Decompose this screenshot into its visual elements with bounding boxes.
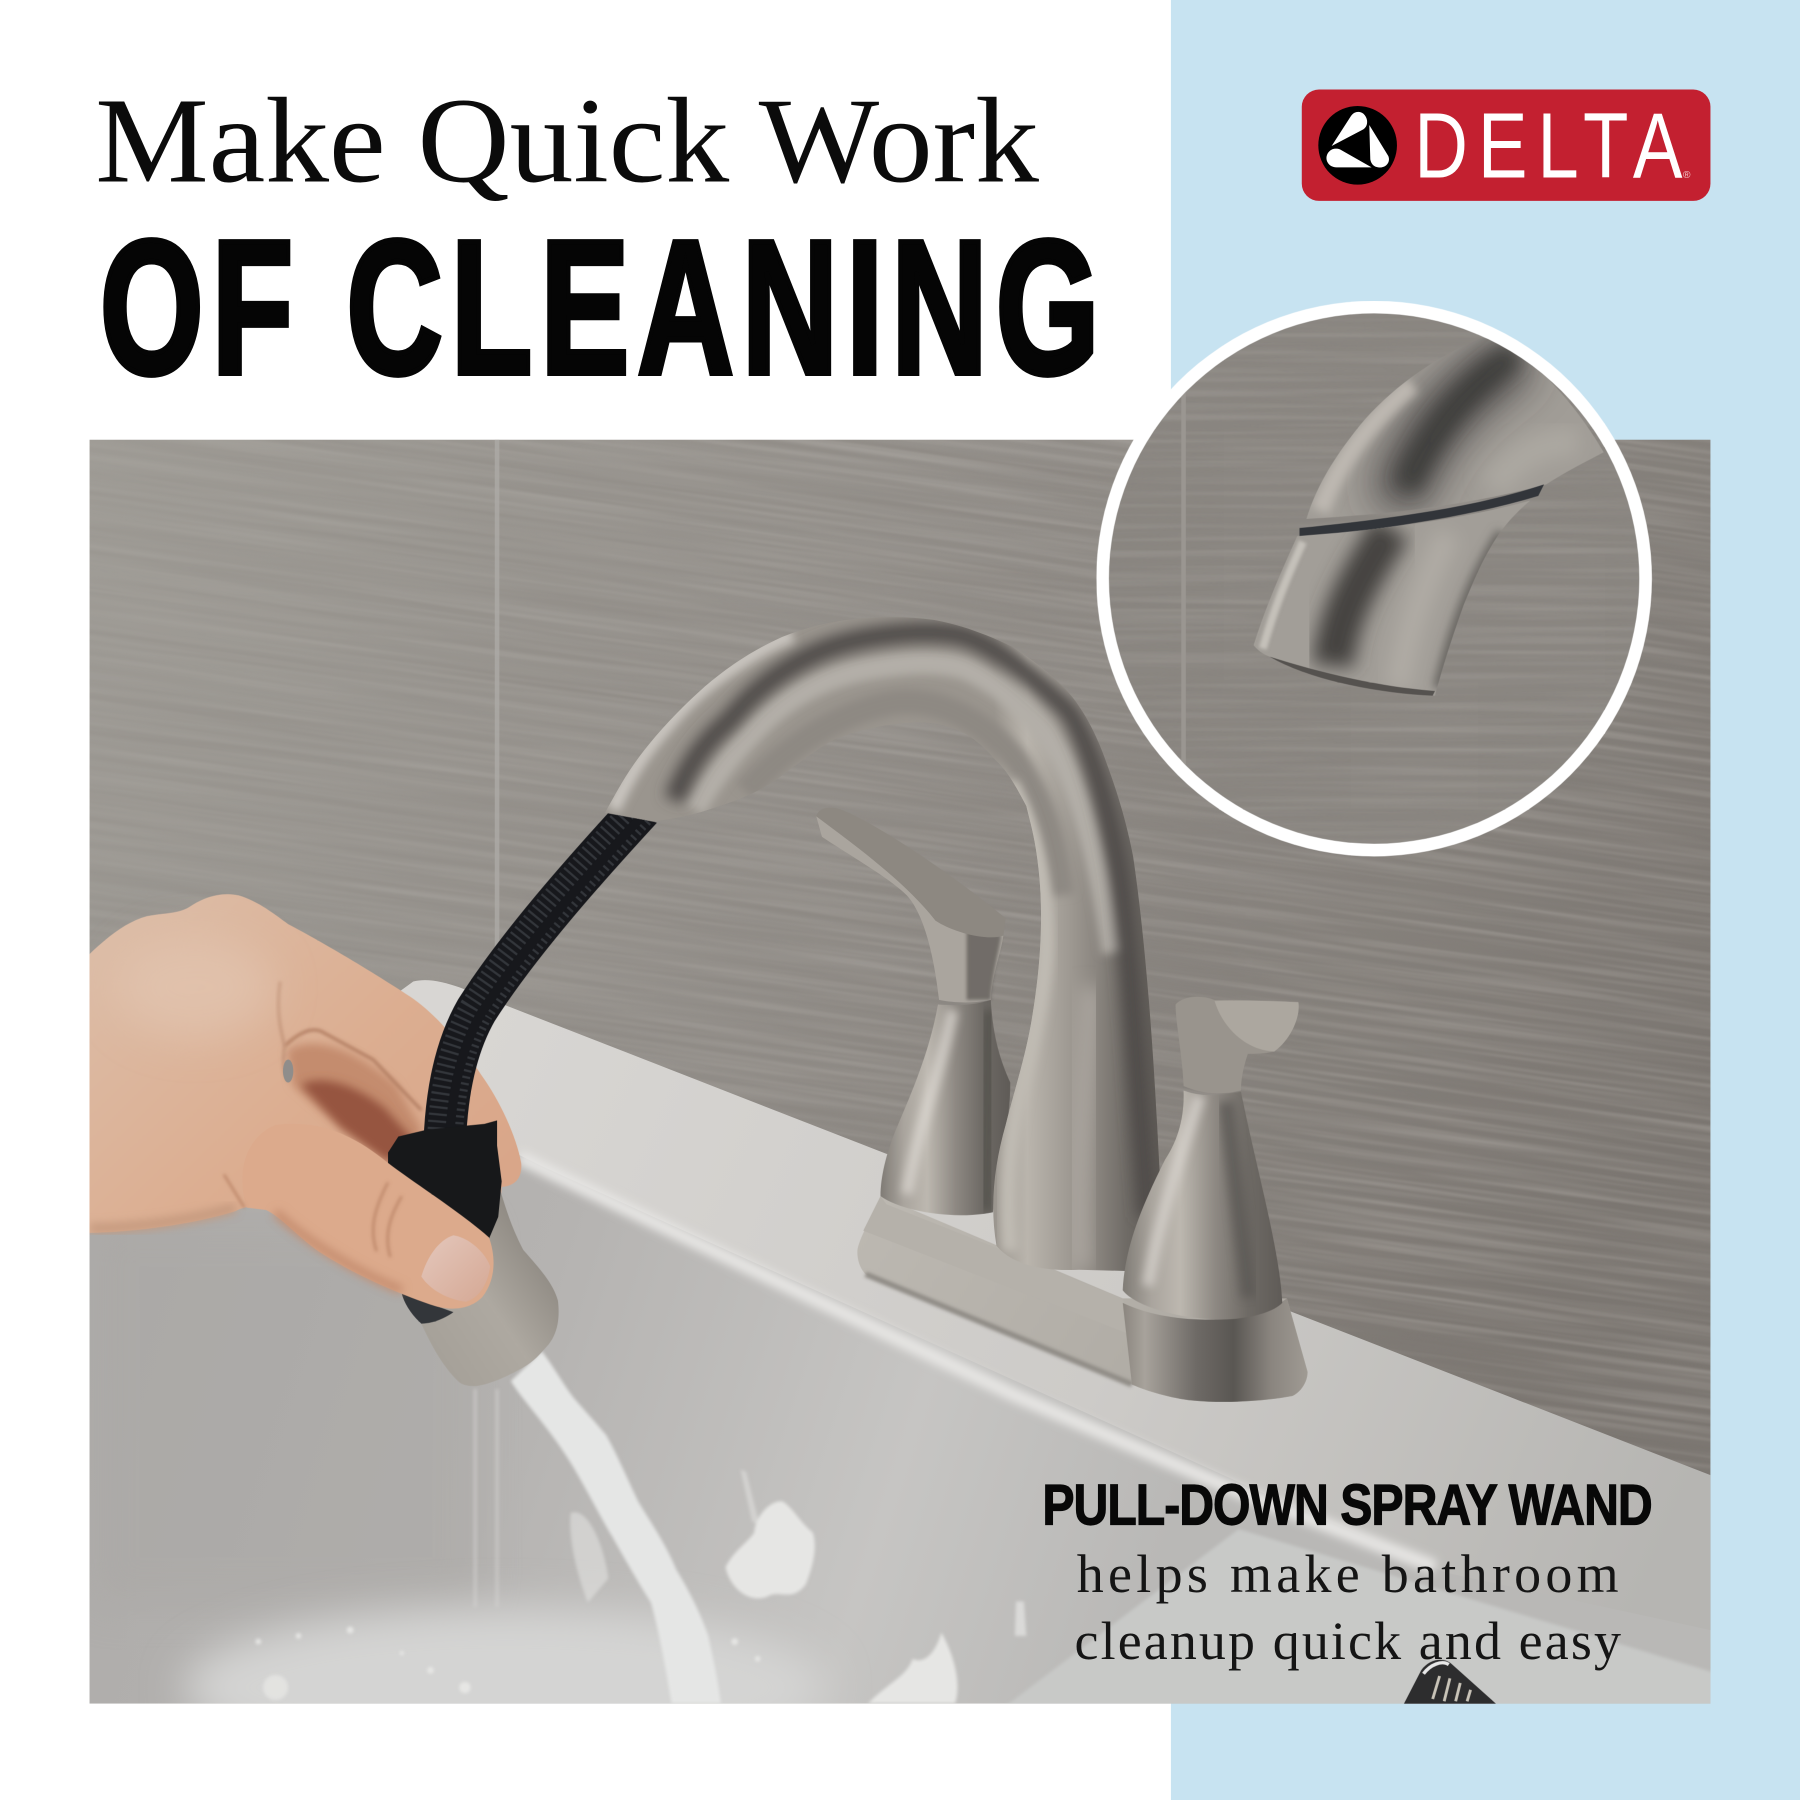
- panel: main photo: [90, 440, 1710, 1704]
- inner rim light: [1008, 783, 1046, 1251]
- thumb nail: [421, 1235, 490, 1302]
- foam in basin: [255, 1469, 1026, 1704]
- right handle lever: [1176, 997, 1299, 1093]
- hose: black braided: [444, 797, 657, 1169]
- registered mark: ®: [1683, 170, 1691, 181]
- caption line 2: cleanup quick and easy: [1074, 1611, 1621, 1671]
- hand: thumb: [224, 1124, 494, 1309]
- lower palm shading: [90, 1208, 235, 1228]
- basin shading left wall: [90, 1217, 482, 1607]
- inset aerator: [1270, 657, 1435, 696]
- left handle neck: [816, 816, 1003, 1002]
- water stream: [511, 1351, 721, 1704]
- tile seam reflection in basin: [475, 1389, 497, 1607]
- caption heading: PULL-DOWN SPRAY WAND: [1042, 1474, 1653, 1537]
- wand black collar: [388, 1120, 502, 1239]
- spray wand: [388, 1120, 559, 1386]
- wedding ring: [283, 1060, 293, 1083]
- inset wall texture: [1033, 253, 1722, 895]
- inset gasket: [1299, 484, 1544, 538]
- faucet right handle: [1123, 997, 1299, 1320]
- outer highlight: [613, 635, 792, 809]
- foam floor in basin: [175, 1592, 818, 1704]
- wall tile texture: [494, 440, 1710, 1468]
- title line 2: OF CLEANING: [100, 200, 1100, 414]
- title line 1: Make Quick Work: [95, 74, 1039, 208]
- finger gap shadow: [301, 1080, 416, 1162]
- dark band: [674, 632, 1148, 1217]
- thumb underside shading: [276, 1212, 402, 1290]
- base top surface: [864, 1196, 880, 1231]
- base end cap: [1123, 1298, 1308, 1402]
- light band: [695, 663, 1114, 953]
- right handle body: [1123, 1091, 1282, 1320]
- caption: [1042, 1474, 1653, 1671]
- basin rim highlight: [519, 1157, 1435, 1567]
- right handle lever cup: [1215, 1001, 1299, 1052]
- logo: Delta: [1302, 90, 1710, 201]
- drain fitting at bottom edge: [1404, 1660, 1496, 1704]
- faucet spout: [605, 617, 1161, 1272]
- wand steel body: [421, 1182, 559, 1386]
- sink counter: [400, 980, 1710, 1630]
- sink basin: [90, 1148, 1710, 1704]
- inset: close-up of spout: [1033, 253, 1722, 895]
- title: [95, 74, 1100, 414]
- wand lower gasket: [402, 1294, 453, 1324]
- thumb creases: [224, 1174, 402, 1257]
- icon: Delta triangle mark: [1318, 106, 1397, 185]
- left handle lever top: [816, 808, 1006, 937]
- faucet left handle: [816, 808, 1010, 1215]
- caption line 1: helps make bathroom: [1077, 1544, 1619, 1604]
- inset spout lower: [1254, 501, 1530, 696]
- inset spout upper: [1306, 338, 1604, 519]
- hand: back of hand and fingers: [90, 894, 521, 1306]
- towel under caption: [1000, 1529, 1722, 1710]
- finger shading: [287, 1044, 422, 1162]
- faucet base plate: [857, 1196, 1308, 1402]
- background: light blue column: [1171, 0, 1800, 1800]
- skin highlight: [115, 936, 276, 1039]
- base lower shadow edge: [866, 1274, 1132, 1384]
- left handle body: [880, 1000, 1010, 1215]
- underside mid tone: [746, 702, 1062, 895]
- logo wordmark: DELTA: [1414, 93, 1682, 197]
